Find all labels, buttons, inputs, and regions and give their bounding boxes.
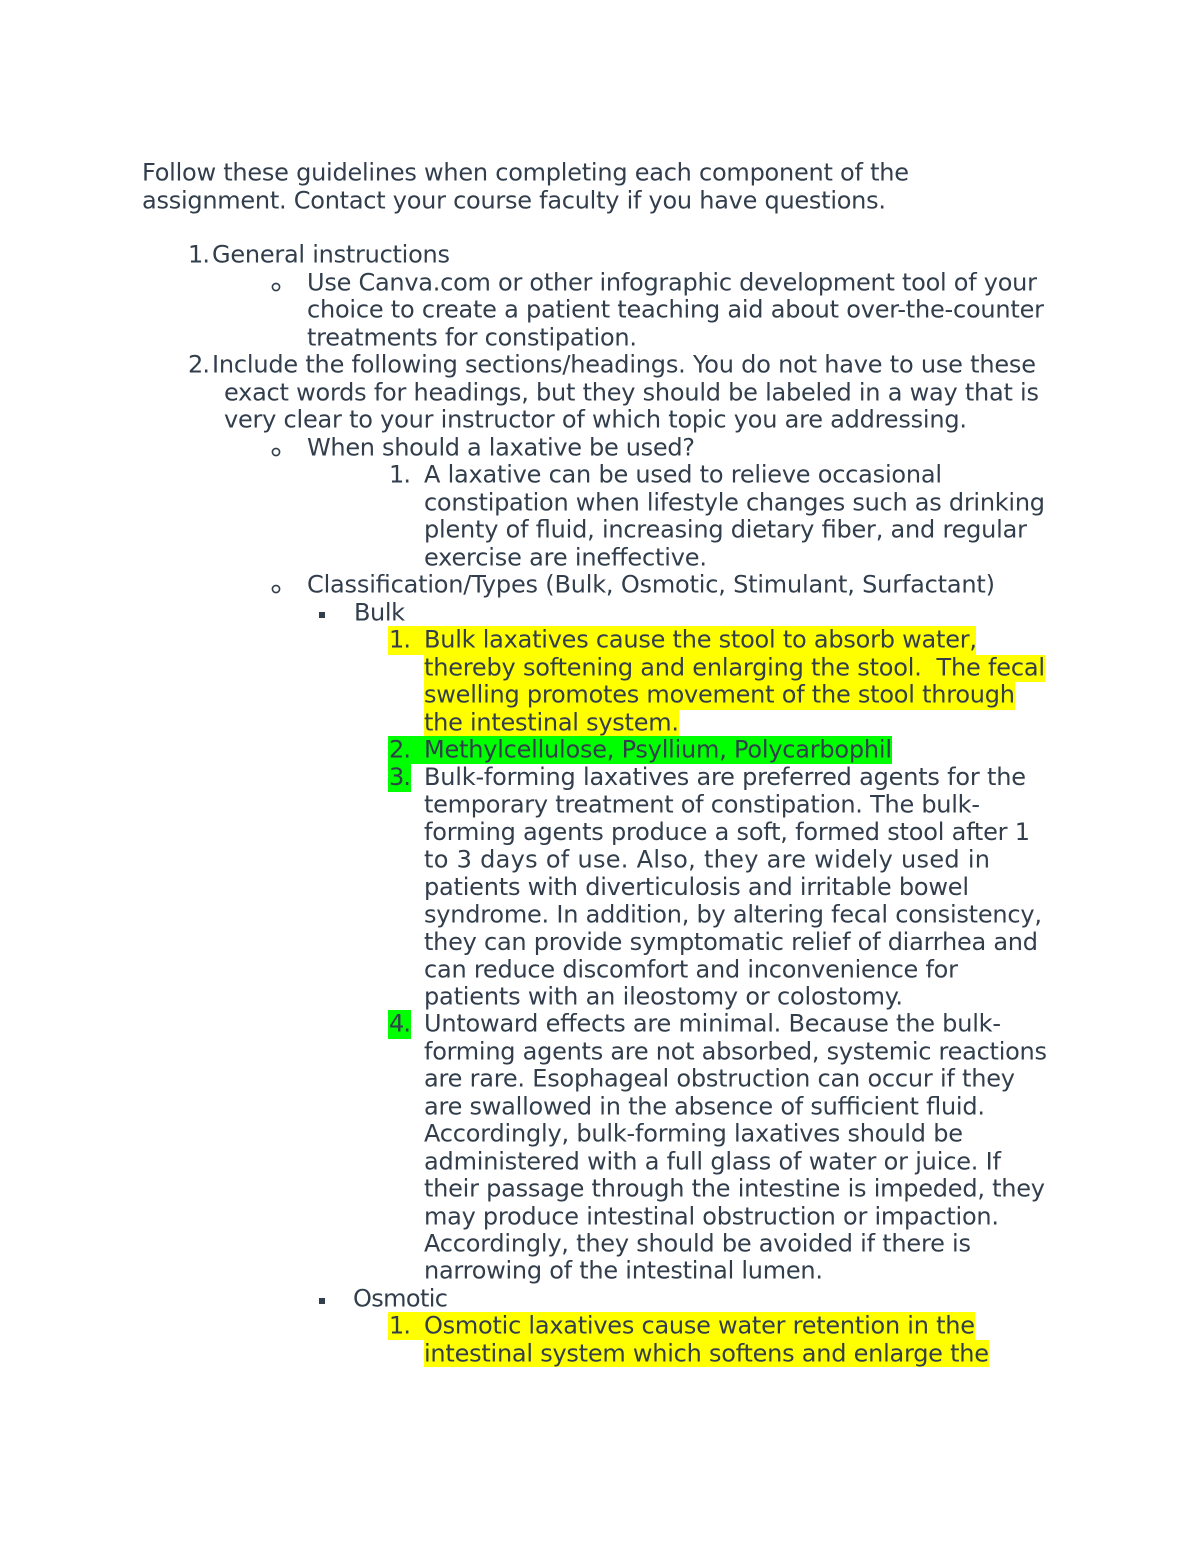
section 2: headings instruction: very clear to your instructor of which topic you are addressing. bbox=[224, 405, 967, 433]
item 3: bulk-forming uses: forming agents produce a soft, formed stool after 1 bbox=[424, 818, 1030, 846]
green highlight: bulk examples: 2. bbox=[389, 735, 411, 763]
topic: when should a laxative be used: exercise are ineffective. bbox=[424, 543, 707, 571]
intro paragraph: assignment. Contact your course faculty if you have questions. bbox=[142, 186, 886, 214]
yellow highlight: osmotic mechanism: Osmotic laxatives cause water retention in the bbox=[424, 1311, 975, 1339]
yellow highlight: bulk mechanism: swelling promotes movement of the stool through bbox=[424, 680, 1015, 708]
item 4: untoward effects: are swallowed in the absence of sufficient fluid. bbox=[424, 1092, 985, 1120]
topic: classification and types: Classification/Types (Bulk, Osmotic, Stimulant, Surfactant) bbox=[307, 570, 995, 598]
topic: when should a laxative be used: When should a laxative be used? bbox=[307, 433, 695, 461]
intro paragraph bbox=[142, 158, 909, 214]
item 3: bulk-forming uses: temporary treatment of constipation. The bulk- bbox=[424, 790, 980, 818]
topic: when should a laxative be used bbox=[272, 433, 1045, 571]
yellow highlight: osmotic mechanism: 1. bbox=[389, 1311, 411, 1339]
section 2: headings instruction bbox=[188, 350, 1039, 433]
item 3: bulk-forming uses: Bulk-forming laxatives are preferred agents for the bbox=[424, 763, 1026, 791]
item 4: untoward effects: their passage through the intestine is impeded, they bbox=[424, 1174, 1045, 1202]
yellow highlight: bulk mechanism: Bulk laxatives cause the stool to absorb water, bbox=[424, 625, 977, 653]
yellow highlight: bulk mechanism bbox=[388, 625, 1045, 736]
section 2: headings instruction: Include the following sections/headings. You do not have to use these bbox=[212, 350, 1036, 378]
green highlight: bulk examples: Methylcellulose, Psyllium, Polycarbophil bbox=[424, 735, 892, 763]
item 4: untoward effects: Untoward effects are minimal. Because the bulk- bbox=[424, 1009, 1001, 1037]
item 4: untoward effects: are rare. Esophageal obstruction can occur if they bbox=[424, 1064, 1015, 1092]
topic: when should a laxative be used: 1. bbox=[389, 460, 411, 488]
yellow highlight: bulk mechanism: the intestinal system. bbox=[424, 708, 679, 736]
item 3: bulk-forming uses: to 3 days of use. Also, they are widely used in bbox=[424, 845, 990, 873]
item 3: bulk-forming uses: they can provide symptomatic relief of diarrhea and bbox=[424, 928, 1038, 956]
item 4: untoward effects: Accordingly, bulk-forming laxatives should be bbox=[424, 1119, 963, 1147]
topic: when should a laxative be used: constipation when lifestyle changes such as drinking bbox=[424, 488, 1045, 516]
yellow highlight: osmotic mechanism bbox=[388, 1311, 989, 1367]
item 4: untoward effects: 4. bbox=[389, 1009, 411, 1037]
section 1: general instructions: treatments for constipation. bbox=[307, 323, 637, 351]
section 1: general instructions: General instructions bbox=[212, 240, 450, 268]
intro paragraph: Follow these guidelines when completing each component of the bbox=[142, 158, 909, 186]
subsection: osmotic laxatives: Osmotic bbox=[353, 1284, 448, 1312]
yellow highlight: osmotic mechanism: intestinal system which softens and enlarge the bbox=[424, 1339, 989, 1367]
subsection: bulk laxatives: Bulk bbox=[354, 598, 405, 626]
item 4: untoward effects: narrowing of the intestinal lumen. bbox=[424, 1256, 823, 1284]
section 1: general instructions bbox=[188, 240, 1044, 351]
item 3: bulk-forming uses: patients with an ileostomy or colostomy. bbox=[424, 982, 903, 1010]
item 3: bulk-forming uses: syndrome. In addition, by altering fecal consistency, bbox=[424, 900, 1042, 928]
item 4: untoward effects: may produce intestinal obstruction or impaction. bbox=[424, 1202, 999, 1230]
item 4: untoward effects bbox=[388, 1009, 1047, 1284]
section 1: general instructions: Use Canva.com or other infographic development tool of your bbox=[307, 268, 1037, 296]
item 3: bulk-forming uses: patients with diverticulosis and irritable bowel bbox=[424, 873, 969, 901]
yellow highlight: bulk mechanism: thereby softening and enlarging the stool. The fecal bbox=[424, 653, 1045, 681]
section 2: headings instruction: exact words for headings, but they should be labeled in a way that is bbox=[224, 378, 1039, 406]
item 3: bulk-forming uses bbox=[388, 763, 1042, 1010]
item 3: bulk-forming uses: can reduce discomfort and inconvenience for bbox=[424, 955, 958, 983]
topic: when should a laxative be used: plenty of fluid, increasing dietary fiber, and regular bbox=[424, 515, 1027, 543]
section 1: general instructions: choice to create a patient teaching aid about over-the-counter bbox=[307, 295, 1044, 323]
item 4: untoward effects: forming agents are not absorbed, systemic reactions bbox=[424, 1037, 1047, 1065]
item 4: untoward effects: Accordingly, they should be avoided if there is bbox=[424, 1229, 971, 1257]
topic: when should a laxative be used: A laxative can be used to relieve occasional bbox=[424, 460, 942, 488]
subsection: osmotic laxatives bbox=[319, 1284, 989, 1367]
yellow highlight: bulk mechanism: 1. bbox=[389, 625, 411, 653]
item 3: bulk-forming uses: 3. bbox=[389, 763, 411, 791]
section 1: general instructions: 1. bbox=[188, 240, 210, 268]
item 4: untoward effects: administered with a full glass of water or juice. If bbox=[424, 1147, 1002, 1175]
section 2: headings instruction: 2. bbox=[188, 350, 210, 378]
subsection: bulk laxatives bbox=[319, 598, 1047, 1284]
